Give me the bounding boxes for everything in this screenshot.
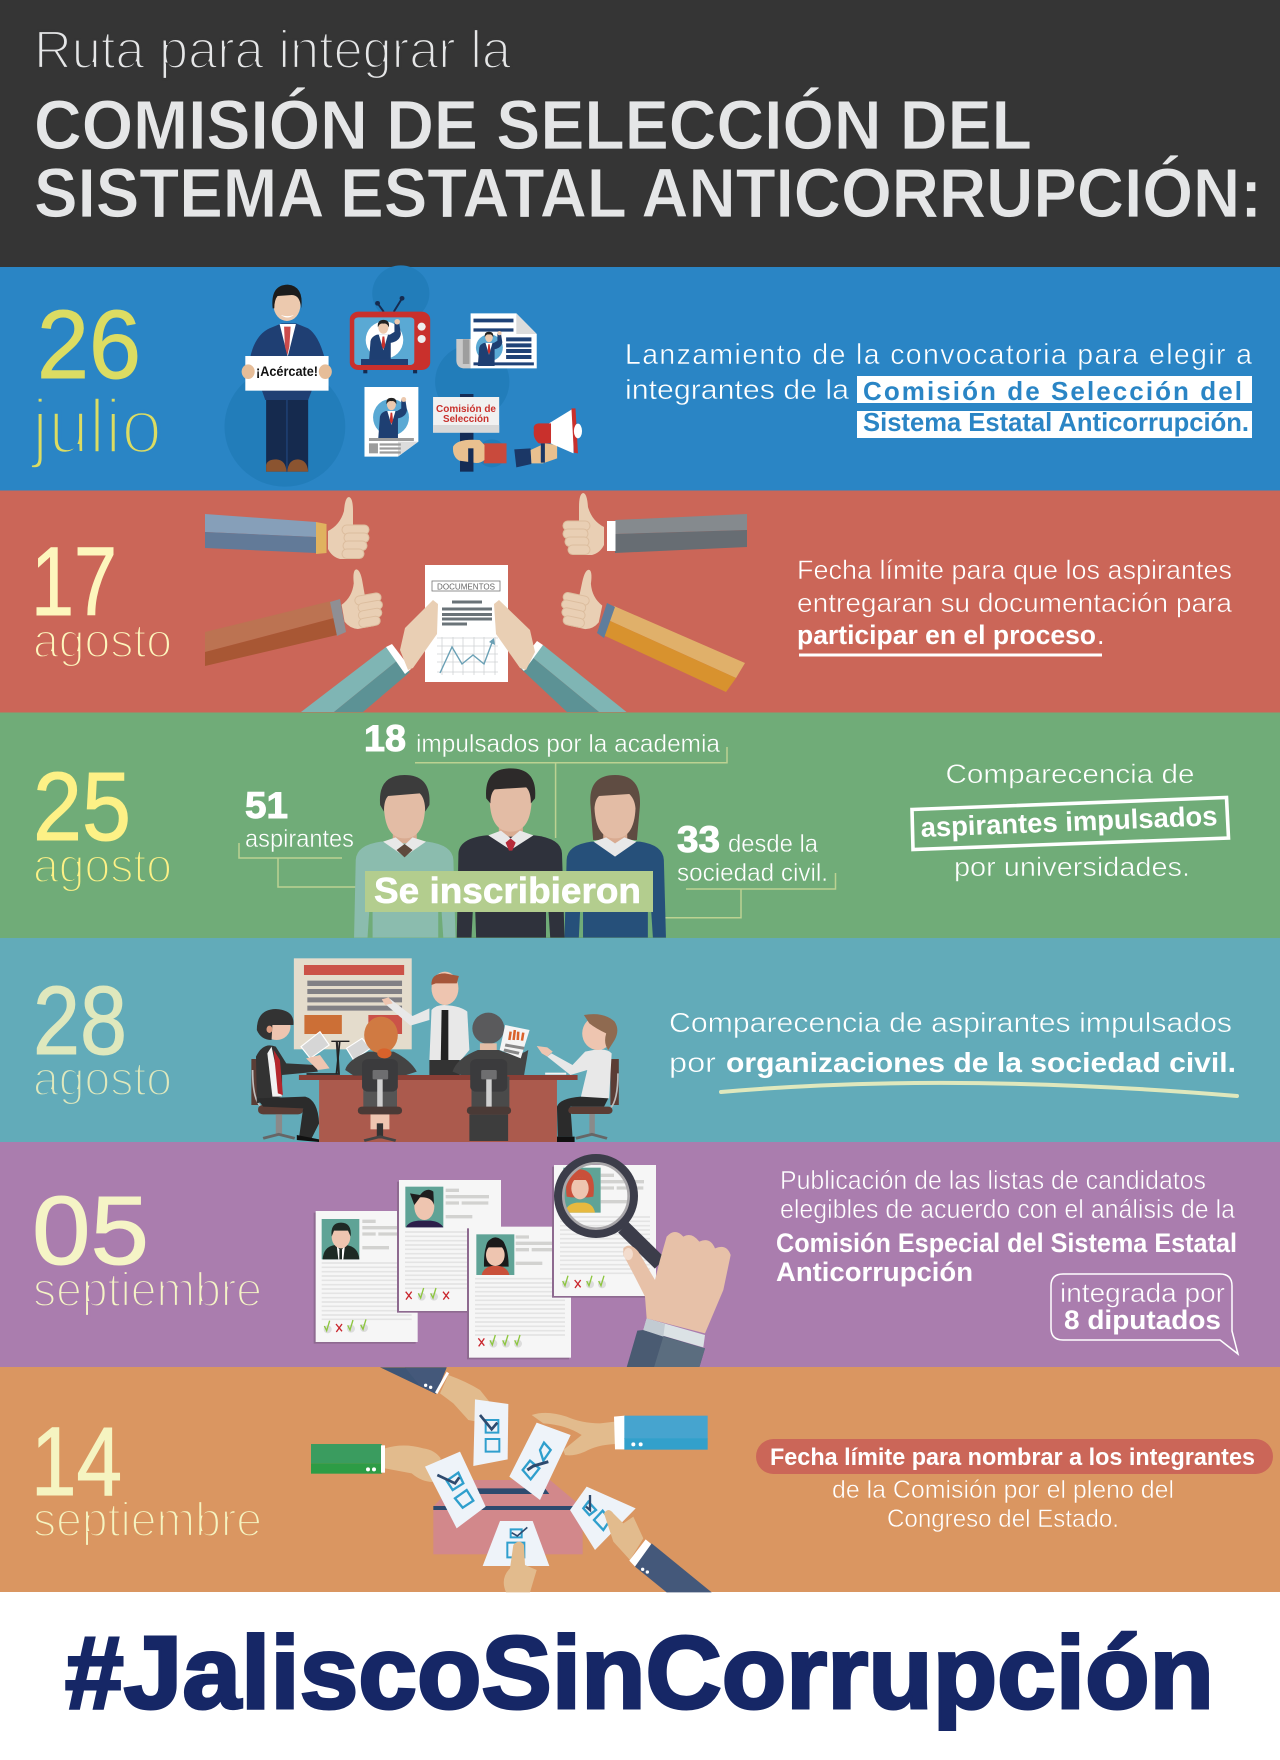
date: 25 agosto: agosto bbox=[33, 840, 172, 893]
date: 05 septiembre: 05 bbox=[32, 1176, 149, 1285]
panel: 17 agosto bbox=[0, 490, 1280, 712]
date: 26 julio: 26 bbox=[37, 290, 141, 399]
pill: fecha límite para nombrar: Fecha límite para nombrar a los integrantes bbox=[770, 1444, 1255, 1471]
arm: top right bbox=[563, 493, 747, 555]
footer hashtag: #JaliscoSinCorrupción bbox=[65, 1615, 1214, 1730]
text: convocatoria: integrantes de la bbox=[625, 374, 849, 405]
date: 28 agosto: agosto bbox=[33, 1053, 172, 1106]
date: 14 septiembre: septiembre bbox=[33, 1494, 262, 1547]
hand holding magnifier bbox=[623, 1232, 731, 1367]
sign text: Comisión de Selección: Comisión de bbox=[436, 404, 496, 415]
ballot box bbox=[433, 1480, 583, 1554]
text: comparecencia universidades bbox=[912, 759, 1228, 882]
text: publicación de listas: elegibles de acuerdo con el análisis de la bbox=[780, 1196, 1236, 1224]
icon: man holding sign bbox=[242, 285, 332, 472]
text: fecha límite documentación bbox=[797, 555, 1233, 656]
hand right with ballot bbox=[509, 1413, 708, 1500]
date: 28 agosto bbox=[33, 966, 172, 1106]
illustration: thumbs up arms bbox=[205, 493, 747, 712]
speech bubble: integrada por 8 diputados: integrada por bbox=[1060, 1278, 1225, 1308]
panel: 14 septiembre bbox=[0, 1367, 1280, 1592]
arm: lower left bbox=[205, 566, 386, 666]
person: left bbox=[354, 775, 455, 938]
stat: 33 desde la sociedad civil: desde la bbox=[728, 830, 818, 858]
text: fecha límite documentación: Fecha límite para que los aspirantes bbox=[797, 555, 1232, 585]
hand top with ballot bbox=[380, 1367, 508, 1466]
title intro line: Ruta para integrar la bbox=[34, 20, 512, 80]
person: center bbox=[457, 768, 565, 938]
icon: newspaper bbox=[456, 313, 537, 368]
underline stroke bbox=[721, 1083, 1237, 1096]
text: pleno del congreso: de la Comisión por el pleno del bbox=[832, 1476, 1174, 1504]
document with chart: DOCUMENTOS bbox=[437, 582, 495, 592]
seated person right bbox=[537, 1014, 619, 1142]
sign text: Acércate: ¡Acércate! bbox=[256, 364, 318, 379]
stat: 18 impulsados por la academia: impulsados por la academia bbox=[416, 730, 720, 758]
hand bottom right with ballot bbox=[570, 1487, 712, 1592]
illustration: hands voting into ballot box bbox=[311, 1367, 712, 1592]
text: fecha límite documentación: entregaran su documentación para bbox=[797, 588, 1233, 618]
sleeves holding document bbox=[301, 641, 626, 712]
text: publicación de listas: Anticorrupción bbox=[776, 1257, 973, 1287]
text: comparecencia sociedad civil: Comparecencia de aspirantes impulsados bbox=[669, 1007, 1232, 1038]
speech bubble: integrada por 8 diputados bbox=[1051, 1274, 1238, 1354]
arm: lower right bbox=[557, 566, 745, 692]
sign text: Comisión de Selección: Selección bbox=[443, 414, 489, 425]
illustration: three applicants bbox=[354, 768, 666, 938]
cv 4 bbox=[552, 1165, 656, 1298]
icon: television bbox=[350, 296, 430, 373]
text: pleno del congreso bbox=[832, 1476, 1174, 1533]
text: comparecencia universidades: por universidades. bbox=[954, 852, 1190, 882]
cv 1 bbox=[314, 1211, 418, 1344]
date: 05 septiembre bbox=[32, 1176, 262, 1317]
stat: 51 aspirantes: aspirantes bbox=[245, 825, 354, 853]
panel: 25 agosto bbox=[0, 712, 1280, 938]
text: comparecencia sociedad civil: por bbox=[669, 1047, 716, 1078]
magnifier bbox=[558, 1158, 660, 1263]
date: 25 agosto bbox=[33, 752, 172, 893]
date: 17 agosto: 17 bbox=[31, 527, 117, 636]
board bbox=[294, 958, 412, 1049]
text: publicación de listas bbox=[776, 1167, 1237, 1287]
title line 1: COMISIÓN DE SELECCIÓN DEL bbox=[34, 86, 1032, 164]
text: publicación de listas: Comisión Especial del Sistema Estatal bbox=[776, 1228, 1237, 1258]
stat: 51 aspirantes: 51 bbox=[245, 785, 288, 826]
date: 25 agosto: 25 bbox=[33, 752, 131, 861]
stat: 18 impulsados por la academia bbox=[364, 718, 720, 759]
mini portraits on media icons bbox=[361, 319, 502, 438]
arm: top left bbox=[205, 497, 369, 559]
date: 14 septiembre bbox=[31, 1407, 262, 1547]
stat: 51 aspirantes bbox=[245, 785, 354, 853]
date: 05 septiembre: septiembre bbox=[33, 1264, 262, 1317]
highlight: Comisión de Selección del: Comisión de Selección del bbox=[863, 376, 1242, 406]
illustration: CVs with magnifier bbox=[314, 1158, 731, 1367]
icon: megaphone bbox=[514, 408, 582, 467]
illustration: meeting around table bbox=[251, 958, 619, 1142]
panel: 26 julio bbox=[0, 265, 1280, 491]
cv 3 bbox=[467, 1227, 571, 1359]
label: Se inscribieron: Se inscribieron bbox=[374, 870, 641, 911]
text: comparecencia universidades: Comparecencia de bbox=[946, 759, 1194, 789]
text: comparecencia sociedad civil bbox=[669, 1007, 1236, 1078]
date: 17 agosto bbox=[31, 527, 172, 668]
cv 2 bbox=[397, 1180, 501, 1313]
panel: 05 septiembre bbox=[0, 1142, 1280, 1367]
presenter bbox=[382, 972, 469, 1077]
speech bubble: integrada por 8 diputados: 8 diputados bbox=[1064, 1305, 1221, 1335]
sign text: Comisión de Selección bbox=[436, 404, 496, 425]
icon: hand with sign bbox=[433, 394, 507, 472]
text: publicación de listas: Publicación de las listas de candidatos bbox=[780, 1167, 1206, 1195]
icon: poster bbox=[364, 387, 418, 457]
boxed text: aspirantes impulsados: aspirantes impulsados bbox=[920, 800, 1218, 843]
date: 17 agosto: agosto bbox=[33, 615, 172, 668]
date: 14 septiembre: 14 bbox=[31, 1407, 122, 1516]
highlight: Sistema Estatal Anticorrupción: Sistema Estatal Anticorrupción. bbox=[863, 407, 1249, 437]
stat: 33 desde la sociedad civil: sociedad civil. bbox=[677, 859, 828, 887]
back view man bbox=[453, 1013, 530, 1141]
text: fecha límite documentación: . bbox=[1097, 620, 1105, 650]
stat: 18 impulsados por la academia: 18 bbox=[364, 718, 406, 759]
hand left with ballot bbox=[311, 1444, 486, 1528]
text: pleno del congreso: Congreso del Estado. bbox=[887, 1505, 1119, 1533]
illustration: man with sign and media icons bbox=[224, 265, 582, 487]
stat: 33 desde la sociedad civil: 33 bbox=[677, 819, 720, 860]
date: 26 julio: julio bbox=[30, 384, 162, 470]
back view woman bbox=[345, 1017, 417, 1141]
text: comparecencia sociedad civil: organizaciones de la sociedad civil. bbox=[726, 1047, 1236, 1078]
date: 26 julio bbox=[30, 290, 162, 470]
connector lines bbox=[239, 747, 836, 918]
table bbox=[299, 1073, 578, 1142]
document with chart bbox=[425, 565, 508, 682]
text: convocatoria bbox=[625, 339, 1252, 438]
hand bottom with ballot bbox=[483, 1521, 549, 1592]
seated person left bbox=[251, 1009, 370, 1142]
header panel bbox=[0, 0, 1280, 267]
stat: 33 desde la sociedad civil bbox=[677, 819, 828, 887]
panel: 28 agosto bbox=[0, 938, 1280, 1142]
hands holding document bbox=[400, 600, 535, 670]
text: convocatoria: Lanzamiento de la convocatoria para elegir a bbox=[625, 339, 1252, 371]
date: 28 agosto: 28 bbox=[33, 966, 127, 1075]
person: right bbox=[565, 775, 666, 938]
text: fecha límite documentación: participar en el proceso bbox=[797, 620, 1096, 650]
